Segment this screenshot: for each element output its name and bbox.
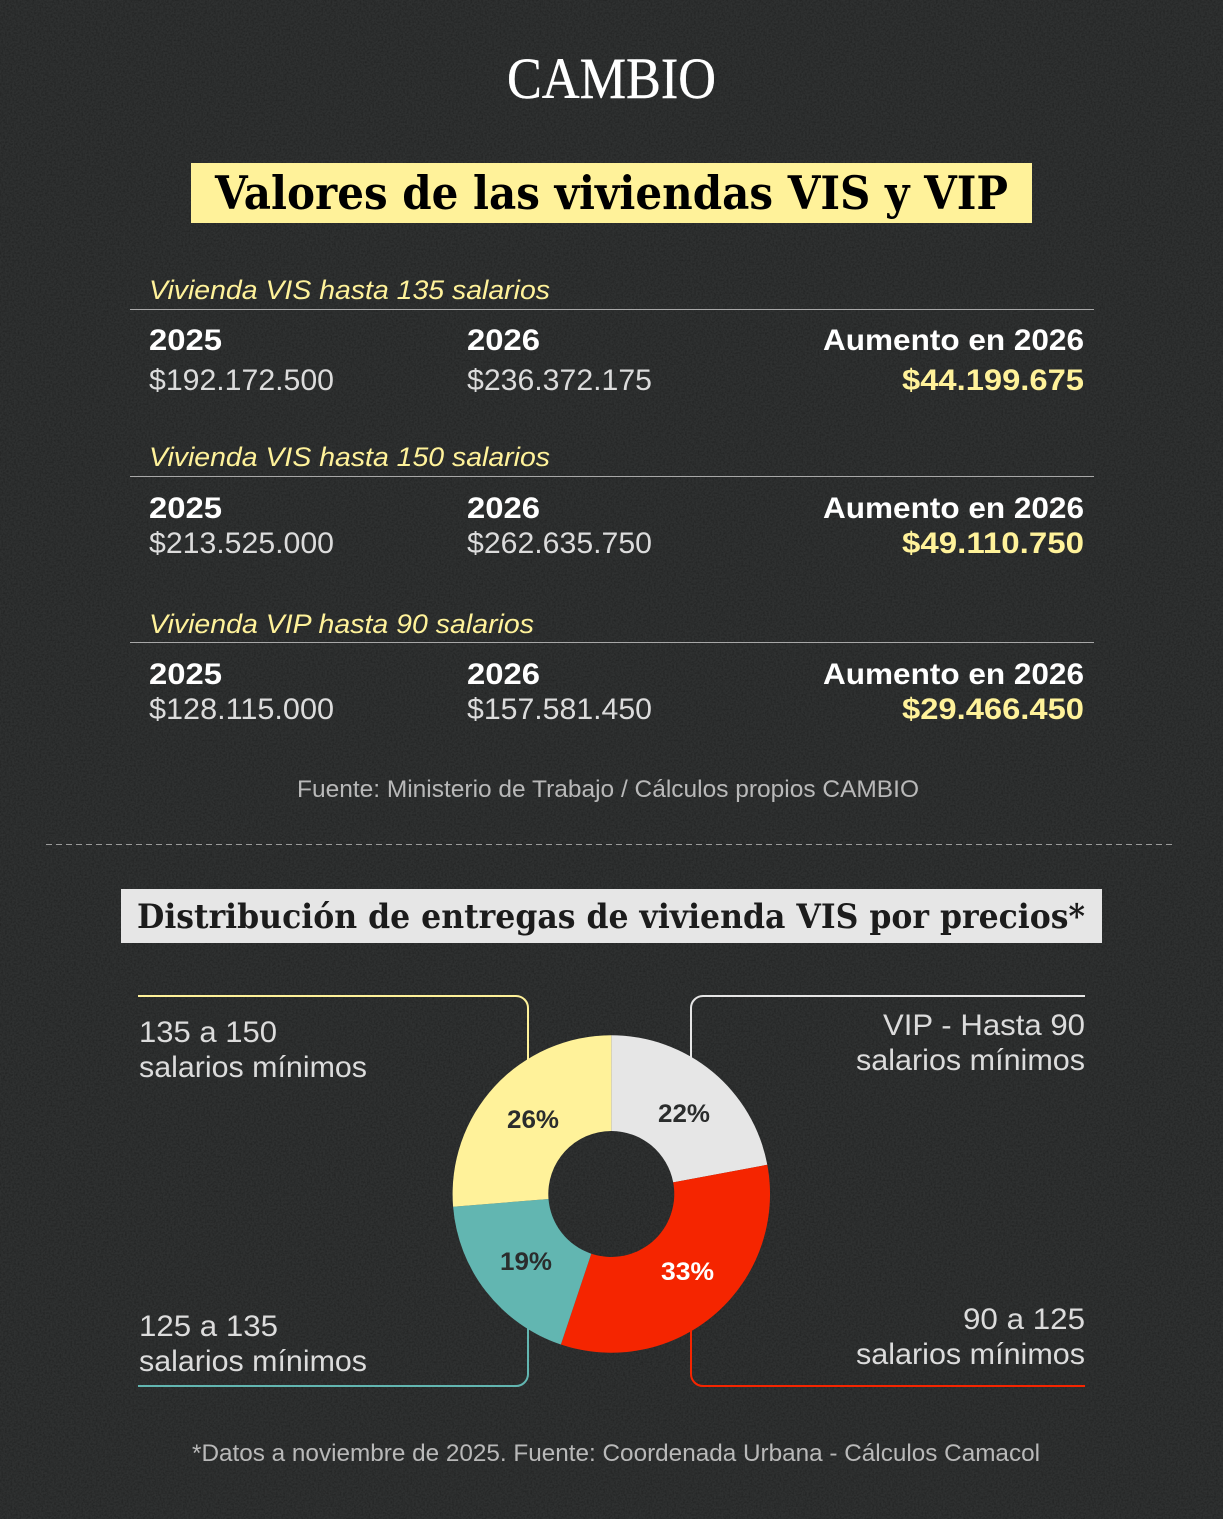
leader line: grey — [691, 996, 1085, 1062]
column increase — [823, 658, 1084, 726]
label: 125 a 135 salarios mínimos — [139, 1310, 367, 1378]
slice: 33% red — [561, 1165, 770, 1353]
column 2026 — [467, 492, 652, 560]
label: VIP - Hasta 90 salarios mínimos: VIP - Hasta 90 — [883, 1009, 1085, 1042]
panel: Vivienda VIS hasta 135 salarios — [130, 275, 1094, 397]
column 2025 — [149, 492, 334, 560]
title: Valores de las viviendas VIS y VIP: Valores de las viviendas VIS y VIP — [214, 166, 1008, 220]
footnote: *Datos a noviembre de 2025. Fuente: Coordenada Urbana - Cálculos Camacol — [192, 1440, 1040, 1467]
column increase: $44.199.675 — [902, 364, 1084, 397]
column 2026: $157.581.450 — [467, 693, 652, 726]
subheading: Vivienda VIS hasta 135 salarios — [149, 275, 550, 305]
label: 135 a 150 salarios mínimos: 135 a 150 — [139, 1016, 277, 1049]
panel: Vivienda VIS hasta 150 salarios — [130, 442, 1094, 560]
column 2025: 2025 — [149, 324, 222, 357]
column increase — [823, 324, 1084, 397]
column increase: Aumento en 2026 — [823, 324, 1084, 357]
slice: 19% teal — [453, 1199, 591, 1344]
label: 135 a 150 salarios mínimos: salarios mínimos — [139, 1051, 367, 1084]
column increase — [823, 492, 1084, 560]
column 2025: 2025 — [149, 658, 222, 691]
label: VIP - Hasta 90 salarios mínimos: salarios mínimos — [856, 1044, 1085, 1077]
column increase: $29.466.450 — [902, 693, 1084, 726]
subheading: Vivienda VIS hasta 150 salarios — [149, 442, 550, 472]
column 2026: $262.635.750 — [467, 527, 652, 560]
source note: Fuente: Ministerio de Trabajo / Cálculos propios CAMBIO — [297, 776, 919, 803]
value: 33%: 33% — [661, 1258, 714, 1286]
value: 26%: 26% — [507, 1106, 559, 1134]
column 2025: $192.172.500 — [149, 364, 334, 397]
column 2026: 2026 — [467, 658, 540, 691]
leader line: red — [691, 1326, 1085, 1386]
column 2026: 2026 — [467, 324, 540, 357]
label: VIP - Hasta 90 salarios mínimos — [856, 1009, 1085, 1077]
label: 135 a 150 salarios mínimos — [139, 1016, 367, 1084]
leader line: teal — [138, 1326, 528, 1386]
donut chart — [453, 1035, 770, 1353]
panel: Vivienda VIP hasta 90 salarios — [130, 609, 1094, 726]
value: 19%: 19% — [500, 1248, 552, 1276]
label: 90 a 125 salarios mínimos — [856, 1303, 1085, 1371]
slice: 26% yellow — [453, 1035, 611, 1207]
column 2025: 2025 — [149, 492, 222, 525]
subheading: Vivienda VIP hasta 90 salarios — [149, 609, 534, 639]
leader line: yellow — [138, 996, 528, 1062]
column 2026 — [467, 324, 652, 397]
logo: CAMBIO: CAMBIO — [507, 46, 716, 111]
column 2026 — [467, 658, 652, 726]
column increase: Aumento en 2026 — [823, 492, 1084, 525]
column 2025: $128.115.000 — [149, 693, 334, 726]
column 2025: $213.525.000 — [149, 527, 334, 560]
value: 22%: 22% — [658, 1100, 710, 1128]
heading: Distribución de entregas — [121, 889, 1102, 943]
label: 90 a 125 salarios mínimos: salarios mínimos — [856, 1338, 1085, 1371]
column 2026: $236.372.175 — [467, 364, 652, 397]
column increase: Aumento en 2026 — [823, 658, 1084, 691]
label: 125 a 135 salarios mínimos: 125 a 135 — [139, 1310, 278, 1343]
column 2025 — [149, 658, 334, 726]
column increase: $49.110.750 — [902, 527, 1084, 560]
column 2026: 2026 — [467, 492, 540, 525]
label: 90 a 125 salarios mínimos: 90 a 125 — [963, 1303, 1085, 1336]
heading: Distribución de entregas: Distribución de entregas de vivienda VIS por precios* — [137, 897, 1085, 937]
slice: 22% grey — [611, 1035, 767, 1182]
column 2025 — [149, 324, 334, 397]
label: 125 a 135 salarios mínimos: salarios mínimos — [139, 1345, 367, 1378]
